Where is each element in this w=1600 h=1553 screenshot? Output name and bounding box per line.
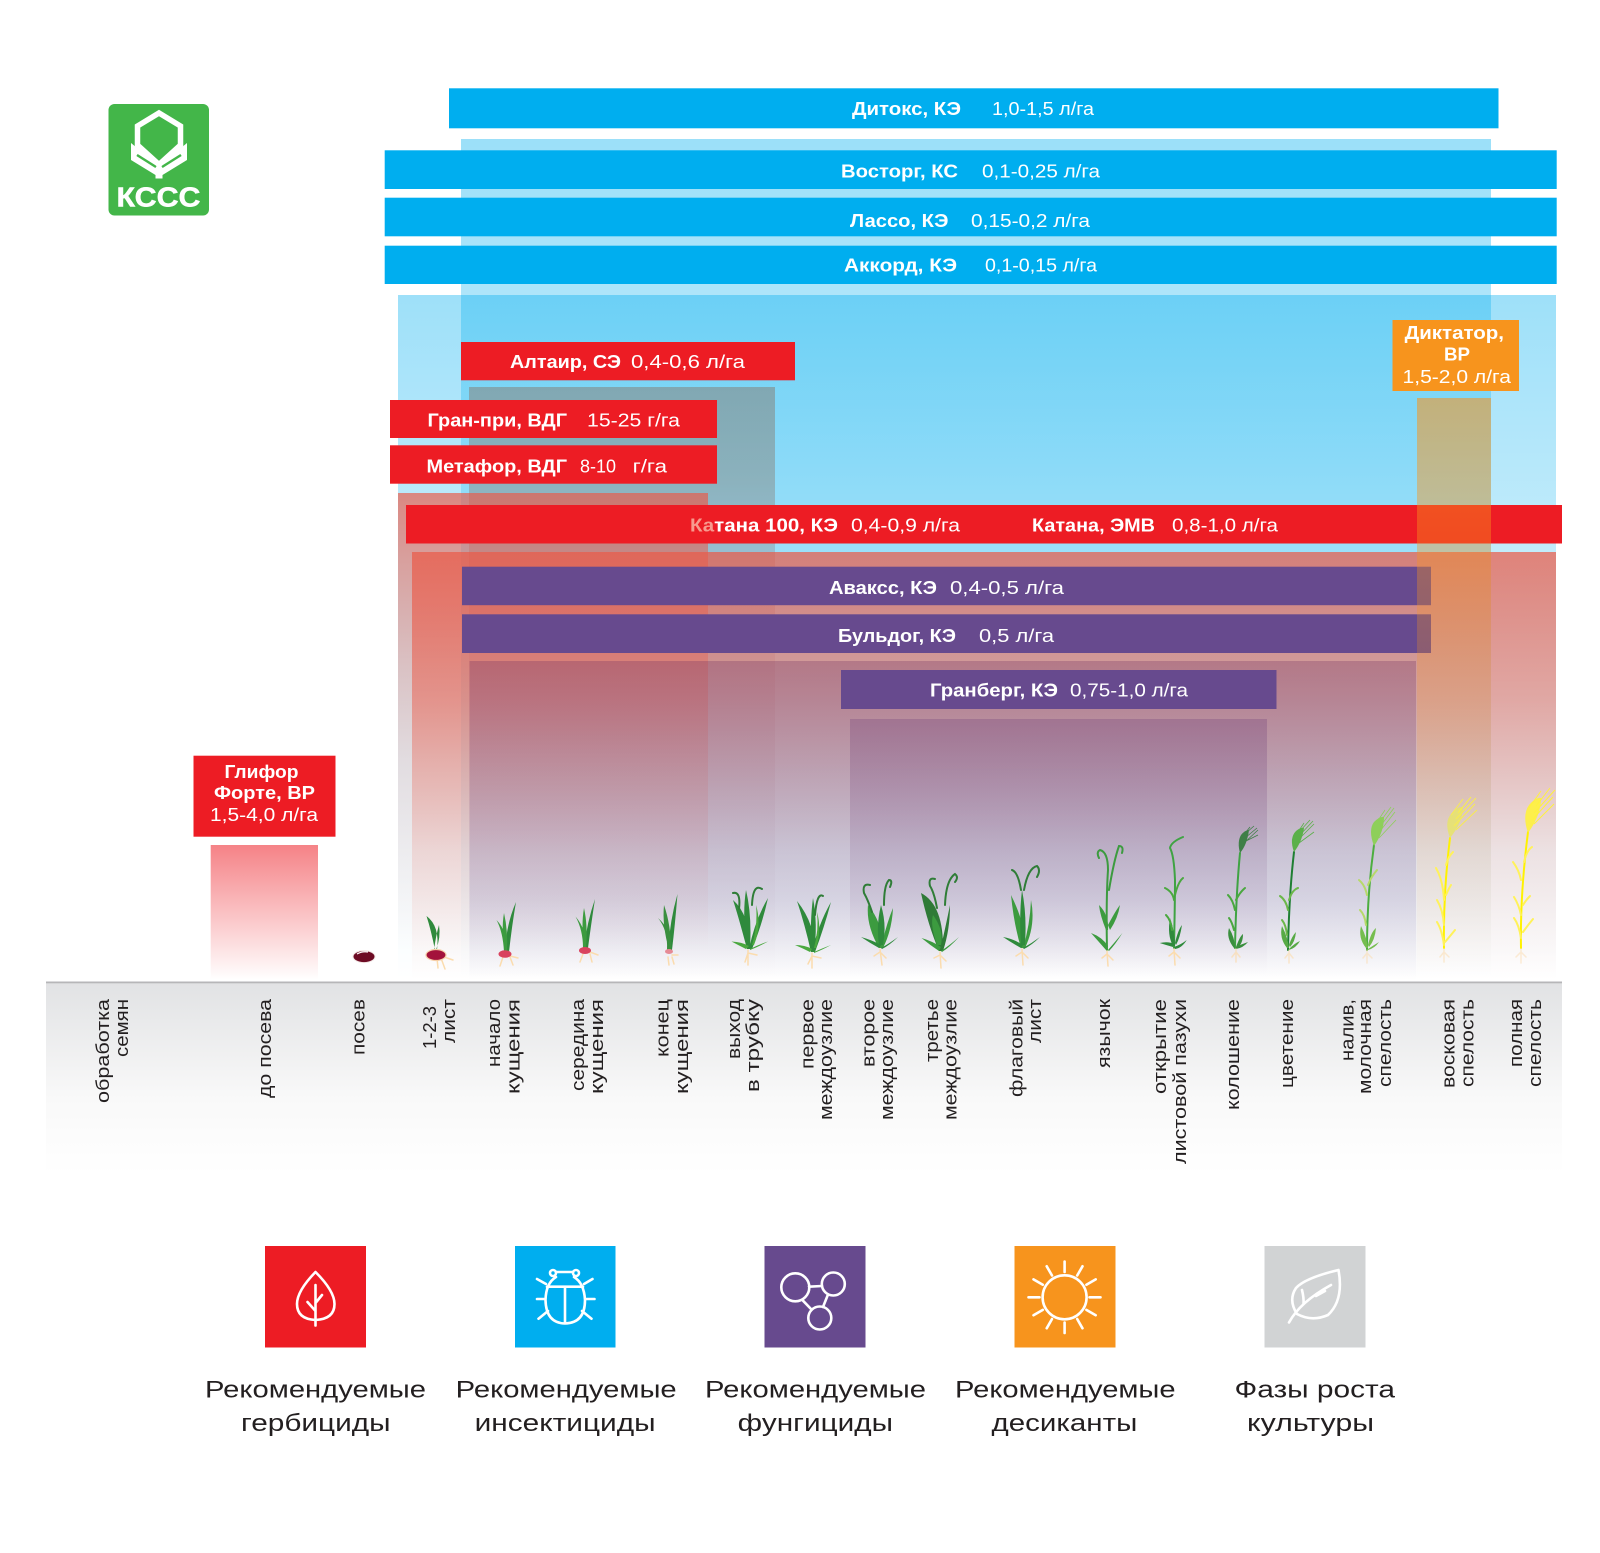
growth phase: колошение: [1228, 826, 1258, 962]
bar: Гран-при: [390, 400, 717, 438]
legend: рекомендуемые гербициды: Рекомендуемые: [205, 1377, 426, 1404]
growth phase: третье междоузлие: [921, 874, 959, 968]
growth phase: начало кущения: [496, 902, 518, 966]
axis labels: growth phases: молочная: [1354, 999, 1375, 1094]
axis labels: growth phases: колошение: [1222, 999, 1243, 1110]
axis labels: growth phases: налив,: [1336, 999, 1358, 1061]
growth phase: флаговый лист: [1003, 866, 1040, 965]
growth phase: 1-2-3 лист: [426, 916, 453, 969]
bar: Гран-при: 15-25 г/га: [587, 410, 681, 431]
axis labels: growth phases: кущения: [586, 999, 607, 1094]
bar: Катана 100, Катана ЭМВ: 0,4-0,9 л/га: [851, 515, 961, 536]
bar: Диктатор: 1,5-2,0 л/га: [1402, 366, 1512, 387]
bar: Глифор Форте: Глифор: [224, 761, 298, 782]
logo: КССС: КССС: [116, 182, 201, 213]
growth phase: полная спелость: [1513, 788, 1555, 963]
growth phase: цветение: [1280, 820, 1314, 963]
bar: Восторг: Восторг, КС: [841, 161, 958, 182]
axis labels: growth phases: обработка: [92, 998, 113, 1103]
bar: Аваксс: [462, 567, 1431, 605]
legend: фазы роста культуры: культуры: [1247, 1410, 1374, 1437]
icon: sun: [1028, 1262, 1100, 1333]
insecticide range underlay: Дитокс: [461, 139, 1491, 980]
bar: Катана 100, Катана ЭМВ: Катана, ЭМВ: [1032, 515, 1155, 536]
legend: рекомендуемые инсектициды: Рекомендуемые: [456, 1377, 677, 1404]
growth phase: выход в трубку: [732, 888, 768, 965]
axis labels: growth phases: кущения: [503, 999, 524, 1094]
axis labels: growth phases: первое: [796, 999, 818, 1069]
bar: Глифор Форте: Форте, ВР: [214, 782, 315, 803]
axis labels: growth phases: [92, 998, 1545, 1164]
axis labels: growth phases: лист: [1024, 998, 1045, 1043]
fungicide range underlay: Гранберг: [850, 719, 1267, 975]
axis labels: growth phases: междоузлие: [876, 999, 897, 1120]
growth phase: язычок: [1091, 846, 1123, 966]
axis labels: growth phases: посев: [348, 999, 368, 1055]
axis labels: growth phases: междоузлие: [815, 999, 836, 1120]
bar: Восторг: [385, 150, 1557, 189]
growth phase: посев (seed): [353, 951, 375, 963]
bar: Диктатор: ВР: [1444, 344, 1470, 365]
bar: Алтаир: Алтаир, СЭ: [510, 351, 621, 372]
axis labels: growth phases: цветение: [1276, 999, 1297, 1088]
axis labels: growth phases: второе: [858, 999, 878, 1067]
growth phase: конец кущения: [658, 894, 678, 965]
legend: рекомендуемые десиканты: десиканты: [992, 1410, 1137, 1437]
legend: рекомендуемые фунгициды: [705, 1246, 926, 1437]
bar: Глифор Форте: 1,5-4,0 л/га: [210, 804, 319, 825]
axis labels: growth phases: третье: [921, 999, 942, 1062]
axis labels: growth phases: открытие: [1149, 999, 1170, 1094]
bar: Метафор: [390, 445, 717, 484]
legend: фазы роста культуры: [1234, 1246, 1395, 1437]
axis labels: growth phases: спелость: [1524, 999, 1545, 1087]
axis labels: growth phases: до посева: [254, 998, 275, 1098]
bar: Аккорд: 0,1-0,15 л/га: [985, 255, 1098, 276]
bar: Аваксс: 0,4-0,5 л/га: [950, 577, 1065, 598]
icon: leaf: [1289, 1270, 1340, 1322]
axis labels: growth phases: междоузлие: [940, 999, 961, 1120]
bar: Бульдог: 0,5 л/га: [979, 625, 1055, 646]
growth phase: второе междоузлие: [861, 880, 898, 965]
bar: Катана 100, Катана ЭМВ: 0,8-1,0 л/га: [1172, 515, 1279, 536]
bar: Гранберг: 0,75-1,0 л/га: [1070, 680, 1189, 701]
bar: Аккорд: Аккорд, КЭ: [844, 255, 957, 276]
axis labels: growth phases: спелость: [1374, 999, 1395, 1087]
bar: Дитокс: 1,0-1,5 л/га: [992, 98, 1095, 119]
axis labels: growth phases: семян: [111, 999, 132, 1057]
axis labels: growth phases: начало: [483, 999, 504, 1067]
axis labels: growth phases: в трубку: [742, 998, 763, 1092]
growth phase: середина кущения: [576, 899, 598, 962]
icon: leaf drop: [297, 1272, 334, 1326]
legend: рекомендуемые инсектициды: [456, 1246, 677, 1437]
bar: Метафор: 8-10: [580, 456, 616, 477]
legend: рекомендуемые десиканты: [955, 1246, 1176, 1437]
herbicide range underlay: Гран-при, Метафор: [398, 493, 708, 980]
bar: Диктатор: Диктатор,: [1405, 322, 1504, 343]
bar: Алтаир: [461, 342, 795, 380]
herbicide range underlay: Алтаир: [469, 387, 775, 980]
growth phase: восковая спелость: [1436, 797, 1477, 962]
growth phase: первое междоузлие: [795, 895, 831, 968]
icon: beetle: [537, 1270, 594, 1324]
axis labels: growth phases: середина: [567, 998, 588, 1091]
herbicide range underlay: Глифор Форте: [211, 845, 318, 980]
legend: рекомендуемые инсектициды: инсектициды: [475, 1410, 656, 1437]
bar: Лассо: Лассо, КЭ: [850, 210, 948, 231]
axis labels: growth phases: лист: [438, 998, 459, 1043]
desiccant range underlay: Диктатор: [1417, 398, 1491, 975]
bar: Лассо: 0,15-0,2 л/га: [971, 210, 1091, 231]
legend: рекомендуемые фунгициды: Рекомендуемые: [705, 1377, 926, 1404]
axis labels: growth phases: 1-2-3: [419, 1006, 440, 1049]
bar: Бульдог: Бульдог, КЭ: [838, 625, 956, 646]
bar: Гран-при: Гран-при, ВДГ: [428, 410, 568, 431]
bar: Гранберг: [841, 670, 1276, 709]
herbicide range underlay: Катана: [412, 552, 1556, 980]
bar: Бульдог: [462, 614, 1431, 653]
legend: фазы роста культуры: Фазы роста: [1234, 1377, 1395, 1404]
axis band: [46, 982, 1562, 1175]
bar: Катана 100, Катана ЭМВ: Катана 100, КЭ: [690, 515, 838, 536]
bar: Гранберг: Гранберг, КЭ: [930, 680, 1058, 701]
growth phase: налив, молочная спелость: [1359, 807, 1396, 963]
axis labels: growth phases: восковая: [1438, 999, 1459, 1088]
axis labels: growth phases: выход: [723, 999, 744, 1059]
growth phase: открытие листовой пазухи: [1160, 837, 1187, 965]
icon: three linked circles: [781, 1272, 845, 1330]
axis labels: growth phases: конец: [652, 999, 672, 1057]
bar: Дитокс: Дитокс, КЭ: [852, 98, 961, 119]
bar: Метафор: Метафор, ВДГ: [426, 456, 568, 477]
bar: Дитокс: [449, 88, 1498, 128]
bar: Аваксс: Аваксс, КЭ: [829, 577, 937, 598]
axis labels: growth phases: флаговый: [1006, 999, 1026, 1097]
bar: Восторг: 0,1-0,25 л/га: [982, 161, 1101, 182]
axis labels: growth phases: спелость: [1456, 999, 1478, 1087]
logo: КССС: [108, 104, 209, 216]
bar: Лассо: [385, 198, 1557, 236]
bar: Метафор: г/га: [633, 456, 668, 477]
axis labels: growth phases: кущения: [671, 999, 692, 1094]
bar: Глифор Форте: [194, 756, 336, 837]
bar: Диктатор: [1392, 320, 1519, 391]
legend: рекомендуемые десиканты: Рекомендуемые: [955, 1377, 1176, 1404]
fungicide range underlay: Аваксс, Бульдог: [470, 661, 1416, 980]
bar: Аккорд: [385, 246, 1557, 284]
axis labels: growth phases: листовой пазухи: [1169, 999, 1190, 1164]
bar: Катана 100, Катана ЭМВ: [406, 505, 1562, 544]
axis labels: growth phases: полная: [1505, 999, 1526, 1067]
bar: Алтаир: 0,4-0,6 л/га: [631, 351, 746, 372]
insecticide range underlay: Восторг, Лассо, Аккорд: [398, 295, 1556, 980]
axis labels: growth phases: язычок: [1093, 998, 1114, 1068]
legend: рекомендуемые фунгициды: фунгициды: [738, 1410, 893, 1437]
legend: рекомендуемые гербициды: [205, 1246, 426, 1437]
legend: рекомендуемые гербициды: гербициды: [241, 1410, 390, 1437]
